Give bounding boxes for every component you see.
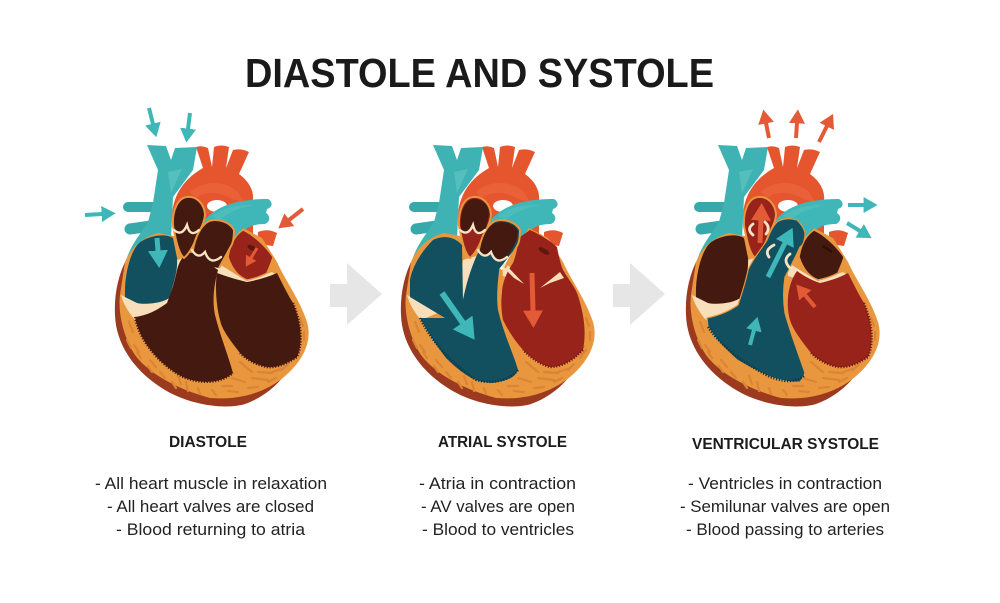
caption: atrial systole: - Blood to ventricles xyxy=(422,520,574,539)
caption: atrial systole xyxy=(419,434,576,539)
arrow: pulmonary out bottom xyxy=(847,223,860,231)
pulmonary trunk xyxy=(193,220,234,268)
chamber: left ventricle relaxed xyxy=(216,273,301,367)
caption: ventricular systole: - Ventricles in contraction xyxy=(688,474,882,493)
caption: ventricular systole: - Blood passing to arteries xyxy=(686,520,884,539)
arrow: inside aorta xyxy=(760,220,761,243)
aortic root xyxy=(459,197,491,258)
chamber: left ventricle contracting xyxy=(788,271,872,367)
pulmonary cap xyxy=(478,222,518,261)
chamber: right ventricle and pulmonary trunk xyxy=(707,219,805,382)
caption: atrial systole: - Atria in contraction xyxy=(419,474,576,493)
chamber: left side filled xyxy=(501,230,585,367)
caption: ventricular systole: - Semilunar valves are open xyxy=(680,497,890,516)
pulmonary trunk xyxy=(479,220,520,268)
caption: diastole: - All heart valves are closed xyxy=(107,497,314,516)
arrow: to aorta left xyxy=(766,123,769,138)
cream chordae xyxy=(507,266,564,288)
caption: diastole: - Blood returning to atria xyxy=(116,520,306,539)
arrow: blood from left xyxy=(85,214,102,215)
arrow: to aorta right xyxy=(819,126,827,142)
arrow: left atrium fill xyxy=(251,248,257,258)
arrow: left atrium to ventricle xyxy=(532,273,533,311)
chamber: right atrium relaxed xyxy=(696,235,748,304)
grey arrow 1 xyxy=(330,263,382,325)
arrow: pulmonary out top xyxy=(848,203,864,207)
arrow: to aorta centre xyxy=(796,123,797,138)
caption: atrial systole: ATRIAL SYSTOLE xyxy=(438,434,567,451)
grey arrow 2 xyxy=(613,263,665,325)
arrow: blood into vena cava 2 xyxy=(188,113,190,129)
caption: diastole: - All heart muscle in relaxation xyxy=(95,474,327,493)
arrow: right atrium fill xyxy=(157,238,158,251)
arrow: blood into pulmonary vein xyxy=(289,209,303,220)
aortic root xyxy=(173,197,205,258)
chamber: left atrium with blood xyxy=(228,230,273,280)
title: DIASTOLE AND SYSTOLE xyxy=(245,50,714,96)
heart: atrial systole xyxy=(401,145,595,406)
arrow: right ventricle up xyxy=(750,330,754,345)
valves xyxy=(460,225,507,261)
arrow: left ventricle up xyxy=(805,295,815,307)
heart: ventricular systole xyxy=(686,123,880,406)
aortic cap xyxy=(461,199,489,233)
chamber: right ventricle relaxed xyxy=(135,253,233,382)
chamber: right atrium with blood xyxy=(125,235,177,304)
heart: diastole xyxy=(85,108,309,406)
caption: atrial systole: - AV valves are open xyxy=(421,497,575,516)
arrow: blood into vena cava xyxy=(149,108,153,124)
valves open xyxy=(750,222,790,268)
chamber: right side filled xyxy=(410,237,518,383)
chamber: left atrium relaxed xyxy=(799,230,844,280)
caption: diastole: DIASTOLE xyxy=(169,434,247,451)
caption: diastole xyxy=(95,434,327,539)
aortic root xyxy=(744,197,776,258)
caption: ventricular systole xyxy=(680,436,890,539)
valves closed xyxy=(174,225,221,261)
arrow: right atrium to ventricle xyxy=(442,293,463,323)
arrow: inside pulmonary trunk xyxy=(768,243,785,277)
caption: ventricular systole: VENTRICULAR SYSTOLE xyxy=(692,436,879,453)
